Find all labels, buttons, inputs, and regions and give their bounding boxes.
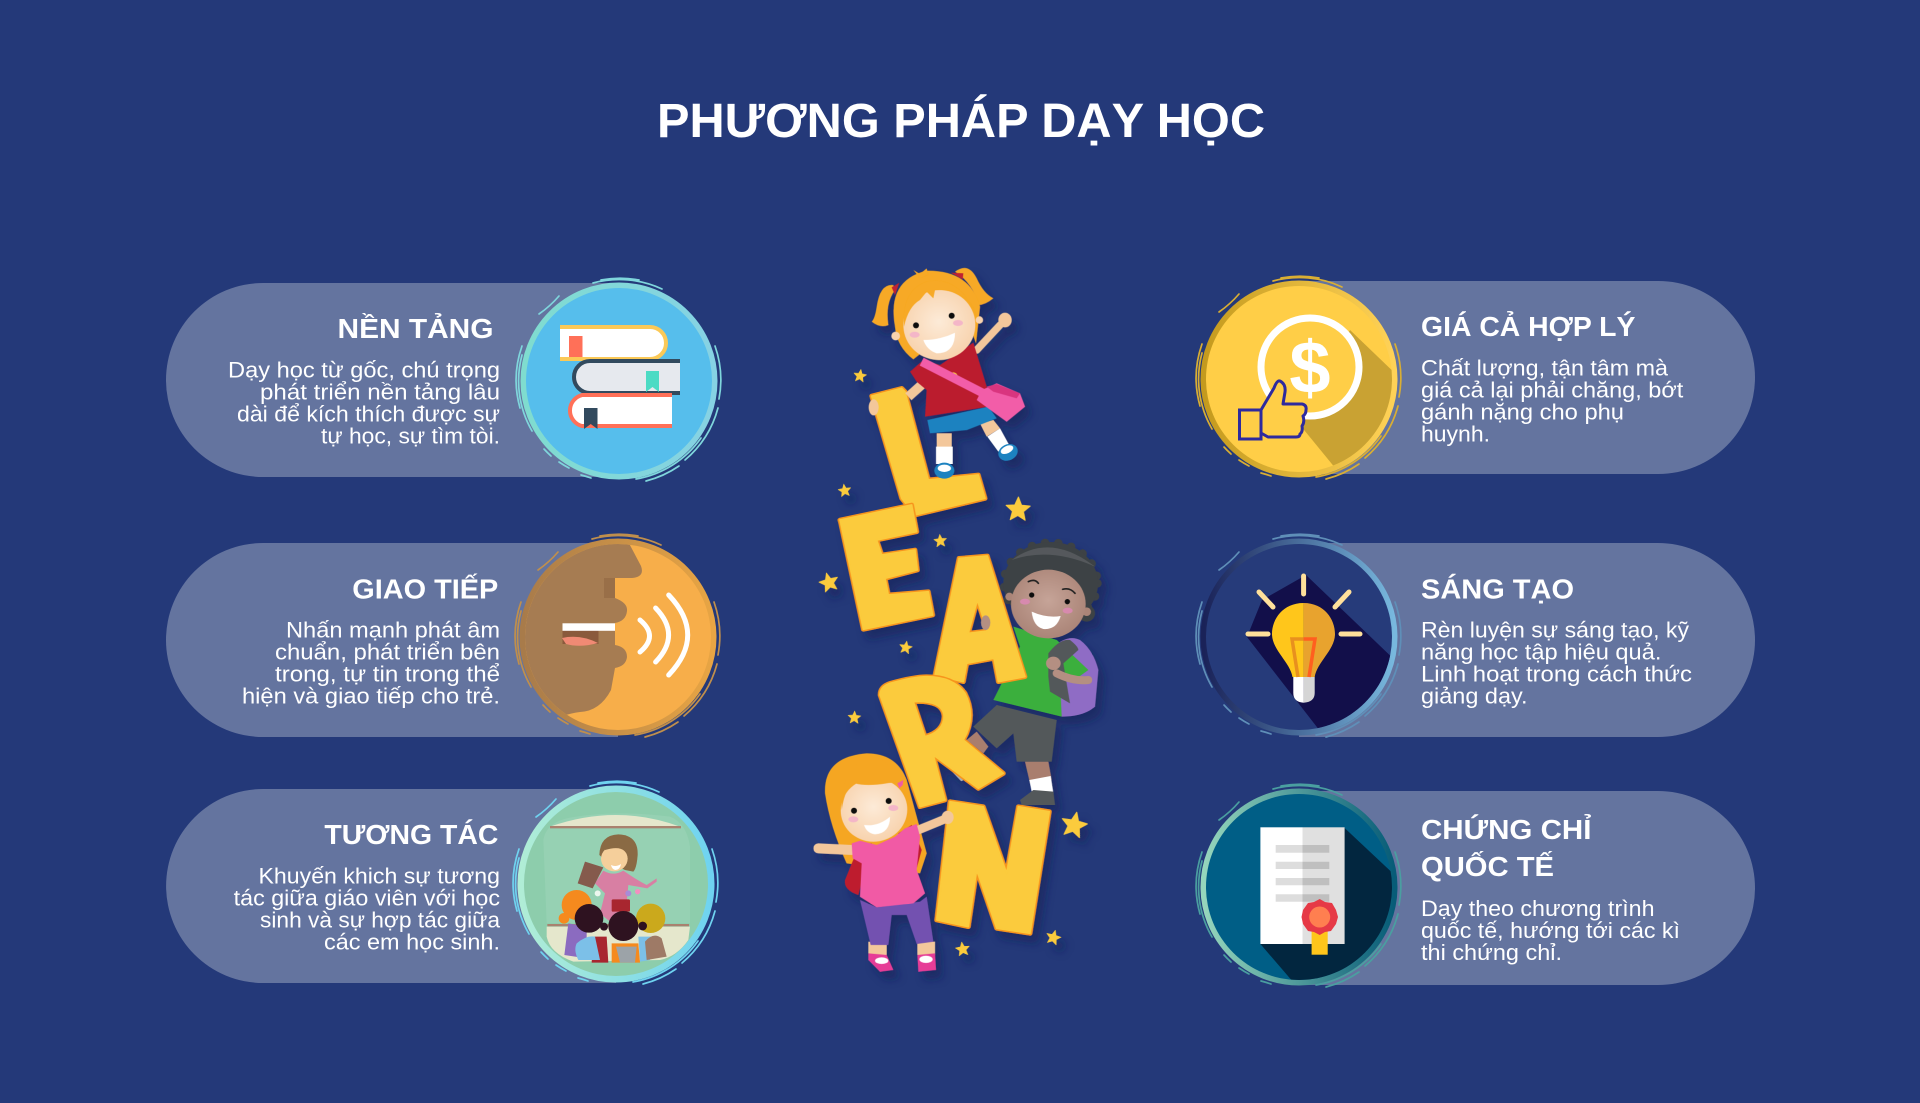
text block: giá cả lại phải chăng, bớt (1421, 378, 1683, 403)
text block: Dạy theo chương trình (1421, 896, 1654, 921)
icon: certificate (1196, 784, 1401, 990)
icon: dollar coin and thumbs up: $ (1289, 326, 1331, 409)
panel: tương tác (166, 781, 718, 984)
heading: GIÁ CẢ HỢP LÝ (1421, 310, 1636, 342)
text block: giảng dạy. (1421, 684, 1528, 709)
text block (228, 357, 500, 448)
panel: sáng tạo (1196, 534, 1755, 740)
girl with pink shirt (818, 753, 954, 972)
text block: Rèn luyện sự sáng tạo, kỹ (1421, 618, 1689, 643)
letter E (840, 505, 933, 629)
heading: CHỨNG CHỈ (1421, 813, 1592, 845)
letter N (937, 802, 1049, 933)
text block: năng học tập hiệu quả. (1421, 640, 1661, 665)
pill background (166, 283, 619, 477)
icon: speaking mouth (500, 530, 720, 740)
letter A (935, 556, 1025, 682)
heading (1421, 813, 1592, 882)
heading: GIAO TIẾP (352, 573, 498, 604)
panel: giá cả hợp lý (1196, 276, 1755, 480)
pill background (1299, 791, 1755, 985)
boy head (981, 542, 1098, 638)
text block: Nhấn mạnh phát âm (286, 618, 500, 643)
text block: hiện và giao tiếp cho trẻ. (242, 684, 500, 709)
heading: TƯƠNG TÁC (324, 819, 498, 850)
pill background (166, 789, 616, 983)
text block: phát triển nền tảng lâu (260, 379, 500, 404)
panel: nền tảng (166, 278, 721, 481)
heading: NỀN TẢNG (338, 312, 494, 344)
text block: Linh hoạt trong cách thức (1421, 662, 1692, 687)
pill background (1299, 281, 1755, 474)
pill background (1299, 543, 1755, 737)
text block: trong, tự tin trong thể (275, 662, 500, 687)
boy body (943, 627, 1098, 805)
pill background (166, 543, 618, 737)
panel: giao tiếp (166, 530, 720, 740)
text block: chuẩn, phát triển bên (275, 640, 500, 665)
text block: tự học, sự tìm tòi. (321, 423, 500, 448)
panel: chứng chỉ quốc tế (1196, 784, 1755, 990)
heading: QUỐC TẾ (1421, 850, 1554, 882)
text block: Khuyến khich sự tương (258, 864, 500, 889)
illustration: LEARN letters and children (817, 268, 1098, 972)
text block: gánh nặng cho phụ (1421, 400, 1624, 425)
text block: huynh. (1421, 422, 1490, 447)
letter L (872, 388, 985, 515)
text block (1421, 618, 1692, 709)
text block: sinh và sự hợp tác giữa (260, 908, 501, 933)
title: PHƯƠNG PHÁP DẠY HỌC (657, 94, 1265, 148)
icon: books (516, 278, 721, 481)
text block: tác giữa giáo viên với học (234, 886, 500, 911)
girl with red shirt (869, 268, 1025, 479)
text block: các em học sinh. (324, 930, 500, 955)
text block: Dạy học từ gốc, chú trọng (228, 357, 500, 382)
text block: quốc tế, hướng tới các kì (1421, 918, 1680, 943)
stars (817, 369, 1089, 956)
letter R (880, 677, 1003, 807)
text block (1421, 356, 1683, 447)
text block (234, 864, 501, 955)
text block: thi chứng chỉ. (1421, 940, 1562, 965)
icon: dollar coin and thumbs up (1196, 276, 1401, 480)
icon: teacher with students (513, 781, 718, 984)
heading: SÁNG TẠO (1421, 573, 1574, 604)
text block (242, 618, 500, 709)
text block: Chất lượng, tận tâm mà (1421, 356, 1669, 381)
text block: dài để kích thích được sự (237, 401, 500, 426)
icon: light bulb (1196, 534, 1401, 740)
text block (1421, 896, 1680, 965)
